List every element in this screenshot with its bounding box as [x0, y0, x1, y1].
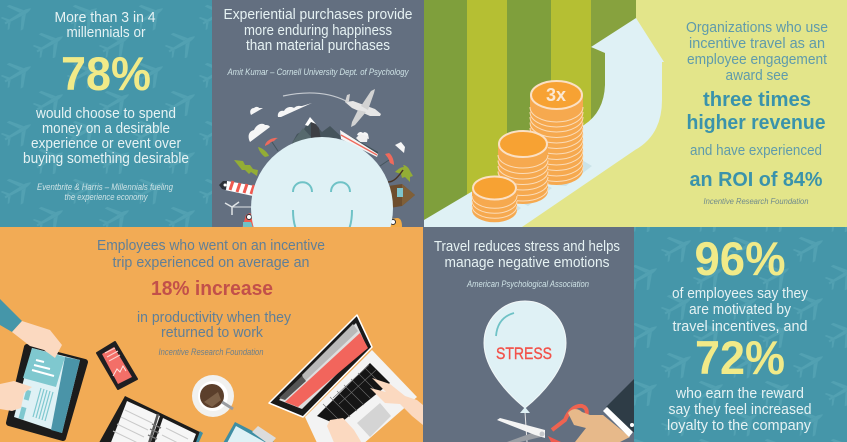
eyes [293, 182, 350, 192]
icon: balloon [484, 301, 566, 442]
statistic 96%: 96% [694, 232, 786, 285]
text: motivated: of employees say they [672, 285, 808, 302]
icon: smiling globe [251, 137, 393, 227]
text: organizations: award see [726, 67, 788, 84]
highlight: three times higher revenue [686, 89, 826, 134]
statistic 72%: 72% [695, 331, 785, 384]
trackpad [357, 403, 391, 437]
text: productivity: returned to work [161, 324, 263, 341]
panel: motivated employees [634, 227, 847, 442]
icon: tablet with hands [0, 299, 85, 438]
text: organizations [686, 19, 828, 84]
text: productivity: in productivity when they [137, 309, 291, 326]
icon: cars [242, 213, 402, 228]
body text [23, 105, 189, 167]
icon: coffee cup [192, 375, 234, 417]
laptop screen [269, 315, 372, 417]
body text: would choose to spend [35, 105, 176, 122]
coin shadows [502, 160, 592, 220]
highlight: three times higher revenue: three times [703, 89, 811, 111]
laptop base [305, 350, 417, 442]
green stripes [424, 0, 636, 228]
keyboard [317, 363, 390, 425]
icon: clipboard [222, 422, 280, 442]
panel: millennials 78% [0, 0, 212, 227]
text: motivated: are motivated by [689, 301, 791, 318]
text: employees: trip experienced on average an [112, 254, 310, 271]
highlight: 18% increase: 18% increase [151, 278, 273, 300]
panel: productivity [0, 227, 423, 442]
heading: more enduring happiness [244, 22, 392, 39]
icon: notebook [95, 396, 203, 442]
upper hand and sleeve [0, 299, 22, 332]
body text: buying something desirable [23, 150, 189, 167]
source [37, 182, 173, 202]
source: Incentive Research Foundation [158, 347, 264, 357]
cuff and sleeve [606, 379, 634, 433]
icon: palm trunk [388, 170, 403, 182]
mouth [292, 210, 353, 227]
large stack with 3x: 3x [546, 85, 566, 105]
panel: three times higher revenue [424, 0, 847, 228]
heading: than material purchases [246, 37, 390, 54]
text: organizations: employee engagement [687, 51, 828, 68]
source: Incentive Research Foundation [704, 196, 809, 206]
text: loyalty: say they feel increased [668, 401, 812, 418]
right hand [370, 378, 423, 425]
body text: money on a desirable [42, 120, 170, 137]
text: loyalty: loyalty to the company [667, 417, 811, 434]
icon: cruise ship [340, 130, 378, 157]
source: Eventbrite & Harris – Millennials fueling [37, 182, 173, 192]
icon: clouds [249, 103, 405, 153]
icon: scissors and hand [497, 379, 634, 442]
intro text [54, 9, 156, 41]
source: American Psychological Association [466, 279, 589, 289]
text: motivated [672, 285, 808, 335]
heading: Travel reduces stress and helps [434, 238, 620, 255]
left hand [327, 418, 363, 442]
icon: wind turbine [225, 202, 252, 215]
source: Amit Kumar – Cornell University Dept. of Psychology [227, 67, 409, 77]
highlight: ROI of 84%: an ROI of 84% [690, 169, 823, 191]
lower hand [0, 381, 32, 411]
balloon label: STRESS [496, 344, 552, 363]
source: the experience economy [64, 192, 148, 202]
text: have experienced: and have experienced [690, 142, 822, 159]
icon: laptop with hands [269, 315, 423, 442]
large stack with 3x [530, 81, 583, 185]
text: organizations: Organizations who use [686, 19, 828, 36]
icon: trees [234, 147, 413, 182]
panel: experiential purchases [212, 0, 424, 227]
intro text: More than 3 in 4 [54, 9, 156, 26]
text: loyalty: who earn the reward [675, 385, 804, 402]
highlight: three times higher revenue: higher revenue [686, 112, 826, 134]
icon: lighthouse [219, 181, 255, 196]
icon: smartphone [97, 342, 137, 389]
icon: mountains [292, 117, 342, 144]
heading [224, 6, 412, 54]
heading: manage negative emotions [444, 254, 610, 271]
icon: house [388, 184, 415, 208]
medium stack [498, 131, 548, 204]
text: productivity [138, 311, 291, 337]
body text: experience or event over [31, 135, 181, 152]
statistic 78%: 78% [61, 47, 151, 100]
text: motivated: travel incentives, and [672, 318, 808, 335]
intro text: millennials or [66, 24, 146, 41]
growth arrow [424, 18, 664, 227]
small stack [472, 176, 517, 222]
text: loyalty [667, 385, 812, 434]
text: employees [97, 237, 325, 271]
heading: Experiential purchases provide [224, 6, 412, 23]
icon: airplane with trail [283, 89, 381, 127]
icon: beach umbrellas [265, 138, 394, 166]
text: employees: Employees who went on an incentive [97, 237, 325, 254]
panel: stress [423, 227, 634, 442]
text: organizations: incentive travel as an [689, 35, 825, 52]
heading [434, 238, 620, 271]
coin stacks [472, 81, 592, 222]
